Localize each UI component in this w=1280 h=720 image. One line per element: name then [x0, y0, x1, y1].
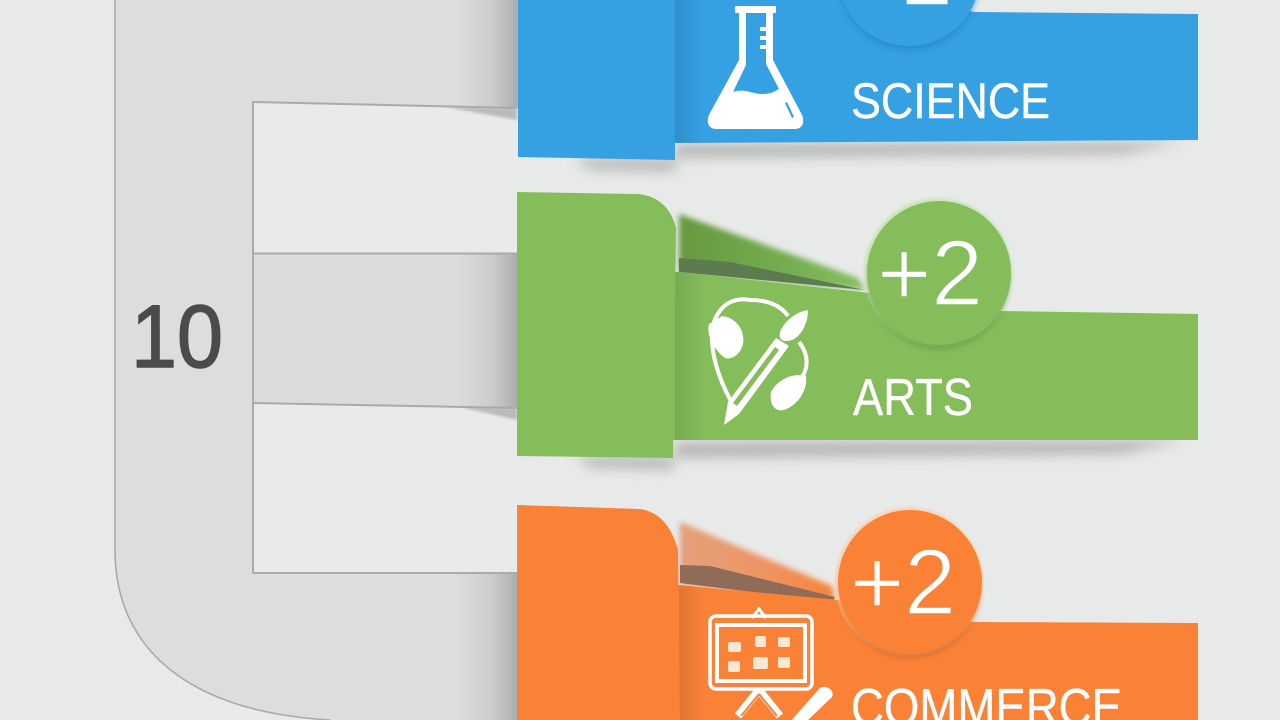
circle badge: science: [838, 0, 980, 50]
band shading: science: [675, 0, 705, 143]
circle badge: arts: +2: [877, 221, 983, 325]
band shading: arts: [675, 272, 705, 440]
circle badge: commerce: +2: [850, 530, 956, 634]
row: upper light slot: [253, 102, 517, 254]
row: lower light slot: [253, 403, 517, 573]
band: commerce: [660, 585, 1198, 720]
circle badge: arts: [864, 198, 1012, 349]
band: arts: [660, 272, 1198, 440]
icon: presentation board and pencil: [710, 609, 833, 720]
shading: top section edge: [458, 0, 518, 108]
shadow: under middle slot line: [460, 407, 517, 420]
fold: commerce: [517, 505, 680, 720]
shadow: science ribbon: [575, 142, 1185, 172]
panel: class 10 bracket: [115, 0, 518, 720]
icon: conical flask: [708, 6, 803, 129]
ribbon: arts: [517, 192, 1198, 470]
slot outlines: [253, 102, 517, 573]
fold: arts: [517, 192, 676, 458]
shading: bottom section edge: [458, 574, 518, 720]
label: arts: ARTS: [853, 369, 973, 427]
band shading: commerce: [679, 585, 705, 720]
ribbon: commerce: [517, 505, 1198, 720]
fold: science: [518, 0, 675, 160]
label: 10: 10: [131, 286, 223, 386]
dark sliver: commerce: [680, 565, 835, 602]
band: science: [660, 0, 1198, 143]
icon: palette and brush: [708, 299, 808, 425]
bracket outline: [115, 0, 330, 720]
shading: middle section edge: [458, 254, 518, 407]
label: science: SCIENCE: [851, 73, 1050, 129]
fold shadow wedge: commerce: [680, 522, 835, 600]
fold shadow wedge: arts: [679, 214, 865, 290]
dark sliver: arts: [679, 258, 865, 290]
row: middle grey slot: [253, 254, 517, 408]
shadow: arts ribbon: [575, 440, 1185, 470]
ribbon: science: [518, 0, 1198, 172]
shadow: under top slot line: [445, 107, 517, 120]
circle badge: commerce: [835, 507, 983, 658]
